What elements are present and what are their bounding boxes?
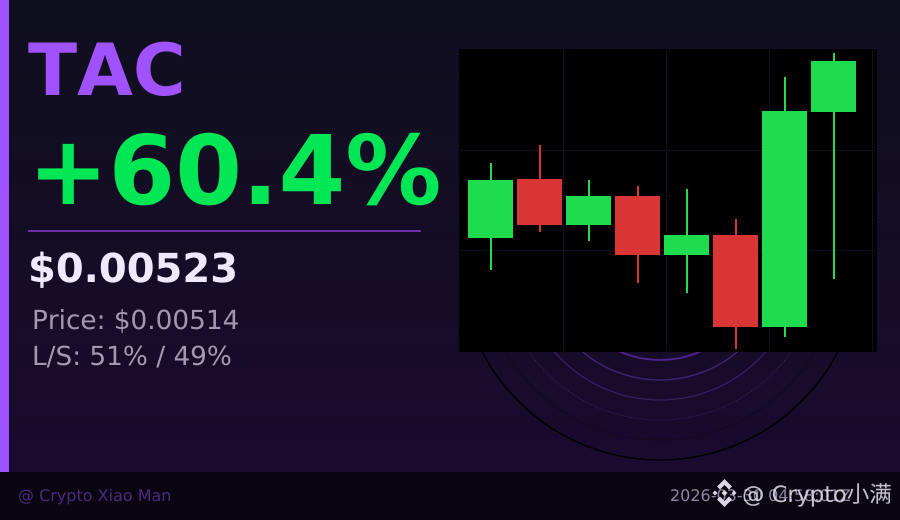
candle 7 <box>762 77 807 337</box>
footer bar <box>0 472 900 520</box>
candle 6 <box>713 219 758 349</box>
concentric rings <box>460 60 860 460</box>
watermark: @ Crypto小满 <box>742 482 892 508</box>
long short ratio: L/S: 51% / 49% <box>32 342 232 372</box>
candle 4 <box>615 186 660 283</box>
chart panel <box>459 49 877 352</box>
candle 1 <box>468 163 513 270</box>
divider <box>28 230 421 232</box>
candle 3 <box>566 180 611 241</box>
footer credit: @ Crypto Xiao Man <box>18 486 171 505</box>
candle 2 <box>517 145 562 232</box>
candlestick chart <box>459 49 877 352</box>
candle 8 <box>811 53 856 279</box>
candle 5 <box>664 189 709 293</box>
icon: binance logo <box>712 479 736 507</box>
percent change: +60.4% <box>28 115 441 227</box>
ticker symbol: TAC <box>28 28 186 112</box>
current price: $0.00523 <box>28 246 238 292</box>
accent bar <box>0 0 9 472</box>
timestamp: 2026-03-30 04:58:01Z <box>670 486 851 505</box>
price detail: Price: $0.00514 <box>32 306 239 336</box>
